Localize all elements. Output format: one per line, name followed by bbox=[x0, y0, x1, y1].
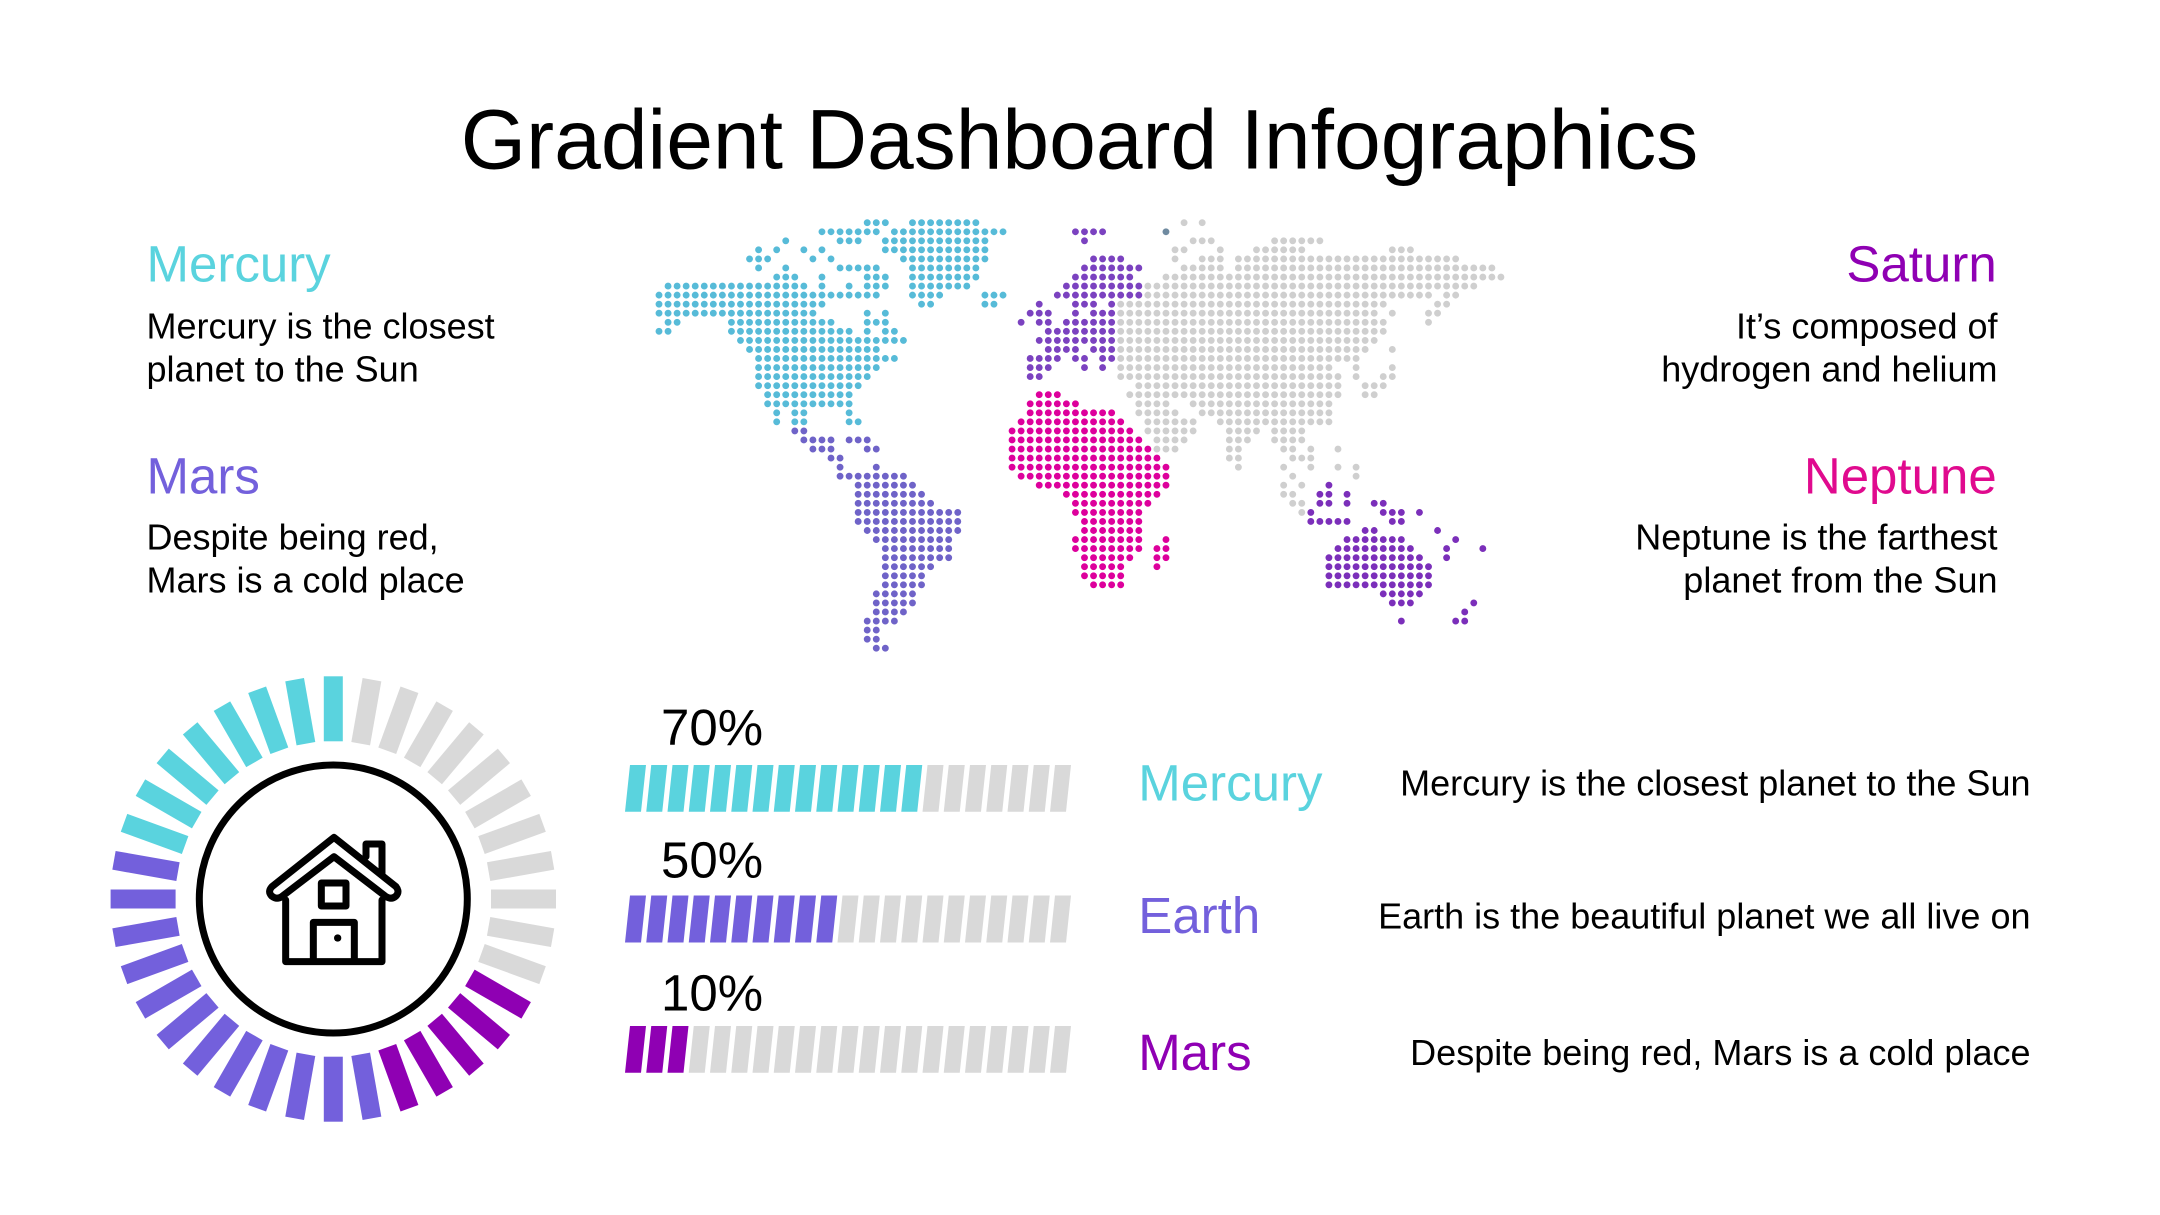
empty segments bbox=[922, 765, 1071, 812]
text block: Neptune bbox=[1635, 447, 1998, 601]
description: Mars: Despite being red, bbox=[146, 516, 439, 557]
text block: Mars bbox=[146, 447, 465, 601]
description: Saturn: hydrogen and helium bbox=[1661, 349, 1998, 390]
heading: Mercury: Mercury bbox=[146, 236, 331, 293]
title: Gradient Dashboard Infographics bbox=[461, 92, 1698, 186]
bar: 70 percent filled bbox=[625, 765, 1071, 812]
bar: 10 percent filled bbox=[625, 1026, 1071, 1073]
ring: grey segments bbox=[351, 678, 556, 984]
ring: cyan segments bbox=[121, 676, 343, 854]
description: Mars: Mars is a cold place bbox=[146, 560, 465, 601]
description: Mars: Despite being red, Mars is a cold place bbox=[1410, 1032, 2030, 1073]
icon: house bbox=[270, 837, 398, 962]
ring: violet segments bbox=[111, 851, 381, 1122]
value: 10%: 10% bbox=[661, 965, 763, 1022]
progress row: 10% bbox=[625, 965, 2030, 1081]
description: Neptune: planet from the Sun bbox=[1683, 560, 1998, 601]
empty segments bbox=[838, 896, 1071, 942]
empty segments bbox=[689, 1026, 1071, 1073]
filled segments bbox=[625, 765, 922, 812]
value: 70%: 70% bbox=[661, 699, 763, 756]
label: Mercury: Mercury bbox=[1138, 754, 1323, 812]
map region: Africa bbox=[1012, 395, 1167, 585]
gauge ring segments bbox=[111, 676, 556, 1122]
description: Mercury: Mercury is the closest planet to the Sun bbox=[1400, 762, 2030, 803]
value: 50%: 50% bbox=[661, 832, 763, 889]
description: Earth: Earth is the beautiful planet we all live on bbox=[1378, 895, 2030, 936]
filled segments bbox=[625, 1026, 688, 1073]
heading: Saturn: Saturn bbox=[1846, 236, 1997, 293]
progress row: 70% bbox=[625, 699, 2030, 812]
map region: North America bbox=[659, 223, 1004, 422]
map region: Asia bbox=[1121, 223, 1502, 512]
description: Mercury: Mercury is the closest bbox=[146, 305, 495, 346]
progress row: 50% bbox=[625, 832, 2030, 944]
map region: Europe bbox=[1021, 232, 1140, 377]
heading: Neptune: Neptune bbox=[1804, 447, 1997, 504]
text block: Saturn bbox=[1661, 236, 1998, 390]
label: Mars: Mars bbox=[1138, 1024, 1252, 1081]
heading: Mars: Mars bbox=[146, 447, 260, 504]
ring: purple segments bbox=[378, 970, 531, 1112]
description: Mercury: planet to the Sun bbox=[146, 349, 419, 390]
map region: South America bbox=[795, 431, 959, 648]
description: Saturn: It’s composed of bbox=[1736, 305, 1998, 346]
map region: Oceania bbox=[1311, 485, 1484, 621]
filled segments bbox=[625, 896, 837, 942]
label: Earth: Earth bbox=[1138, 887, 1260, 944]
description: Neptune: Neptune is the farthest bbox=[1635, 516, 1998, 557]
gauge inner circle bbox=[199, 765, 467, 1033]
radial gauge bbox=[111, 676, 556, 1122]
map dot: Arctic island bbox=[1165, 231, 1168, 233]
dotted world map bbox=[659, 223, 1502, 648]
text block: Mercury bbox=[146, 236, 495, 390]
bar: 50 percent filled bbox=[625, 896, 1071, 942]
